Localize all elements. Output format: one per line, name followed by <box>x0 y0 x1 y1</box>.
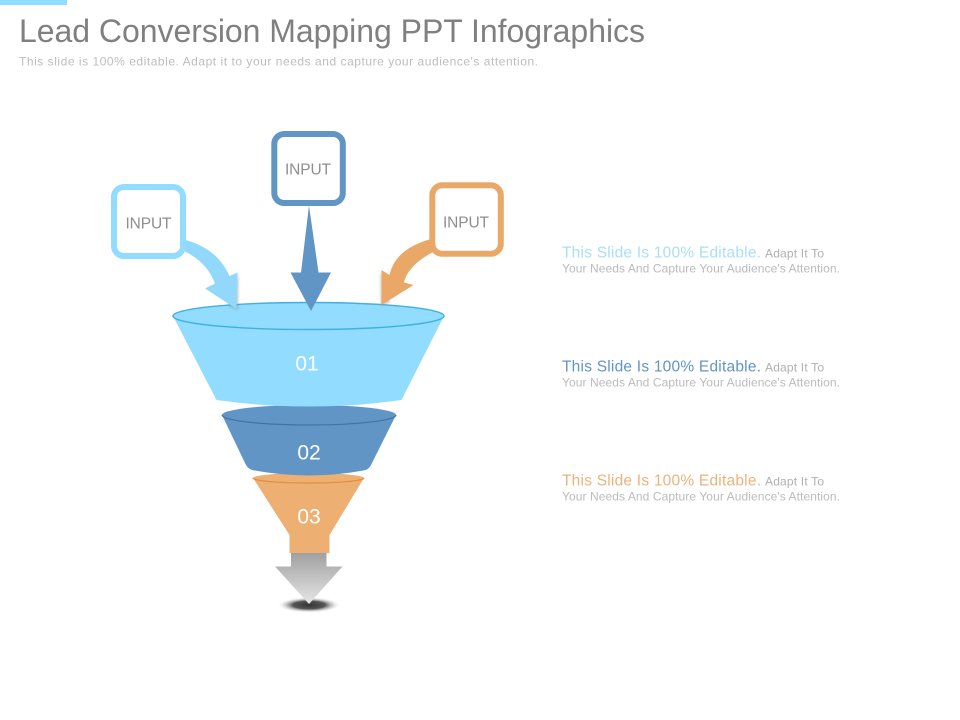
input box: center <box>274 134 343 203</box>
funnel stage 03 <box>253 473 364 553</box>
subtitle: This slide is 100% editable. Adapt it to your needs and capture your audience's attention. <box>19 54 538 68</box>
arrow: funnel output <box>275 553 342 613</box>
text block 3: Your Needs And Capture Your Audience's Attention. <box>562 490 840 504</box>
arrow: blue input <box>290 206 331 311</box>
text block 1: This Slide Is 100% Editable. <box>562 244 761 262</box>
text block 1: Adapt It To <box>765 246 824 260</box>
text block 1: Your Needs And Capture Your Audience's Attention. <box>562 262 840 276</box>
input box: center: INPUT <box>285 162 332 178</box>
input box: right <box>432 185 501 254</box>
input box: left <box>114 187 183 256</box>
text block 2: This Slide Is 100% Editable. <box>562 358 761 376</box>
funnel stage 02: 02 <box>297 442 321 464</box>
title: Lead Conversion Mapping PPT Infographics <box>19 13 645 49</box>
arrow: light blue input <box>182 240 238 310</box>
input box: right: INPUT <box>443 214 490 232</box>
text block 2: Adapt It To <box>765 360 824 374</box>
funnel <box>173 302 444 553</box>
funnel stage 01: 01 <box>295 352 319 376</box>
text block 2: Your Needs And Capture Your Audience's Attention. <box>562 376 840 390</box>
text block 1 <box>562 244 840 276</box>
text block 3: This Slide Is 100% Editable. <box>562 472 761 490</box>
arrow: orange input <box>380 239 433 306</box>
text block 3 <box>562 472 840 504</box>
funnel stage 03: 03 <box>297 506 321 528</box>
input box: left: INPUT <box>126 216 172 232</box>
funnel stage 02 <box>222 405 396 476</box>
funnel stage 01 <box>173 302 444 406</box>
text block 3: Adapt It To <box>765 474 824 488</box>
text block 2 <box>562 358 840 390</box>
top accent bar <box>0 0 67 5</box>
